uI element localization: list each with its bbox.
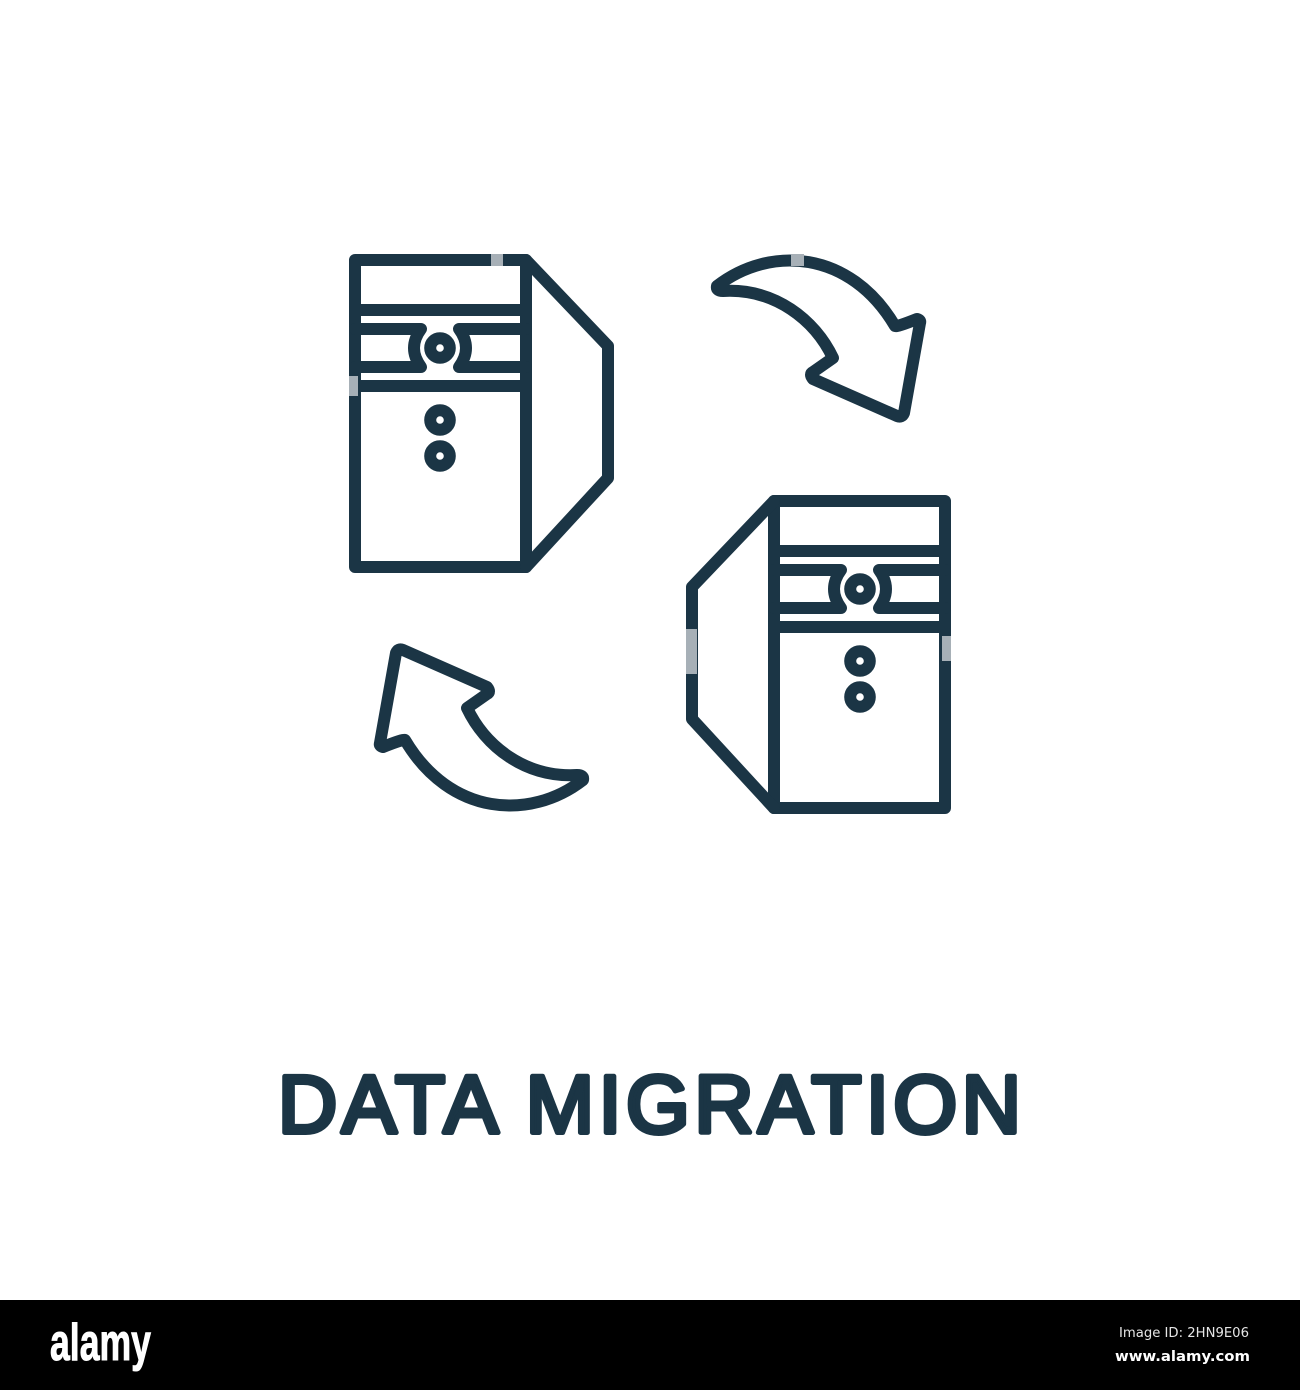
image id: Image ID: 2HN9E06 [1119, 1326, 1249, 1341]
watermark fragments [349, 254, 951, 674]
arrow: bottom left curved arrow [380, 649, 583, 806]
arrow: top right curved arrow [717, 260, 920, 417]
website: www.alamy.com [1115, 1349, 1250, 1365]
icon: right server tower [692, 501, 945, 808]
logo: alamy: alamy [50, 1314, 151, 1372]
icon: left server tower [355, 260, 608, 567]
title: DATA MIGRATION [278, 1060, 1021, 1150]
footer bar [0, 1300, 1300, 1390]
